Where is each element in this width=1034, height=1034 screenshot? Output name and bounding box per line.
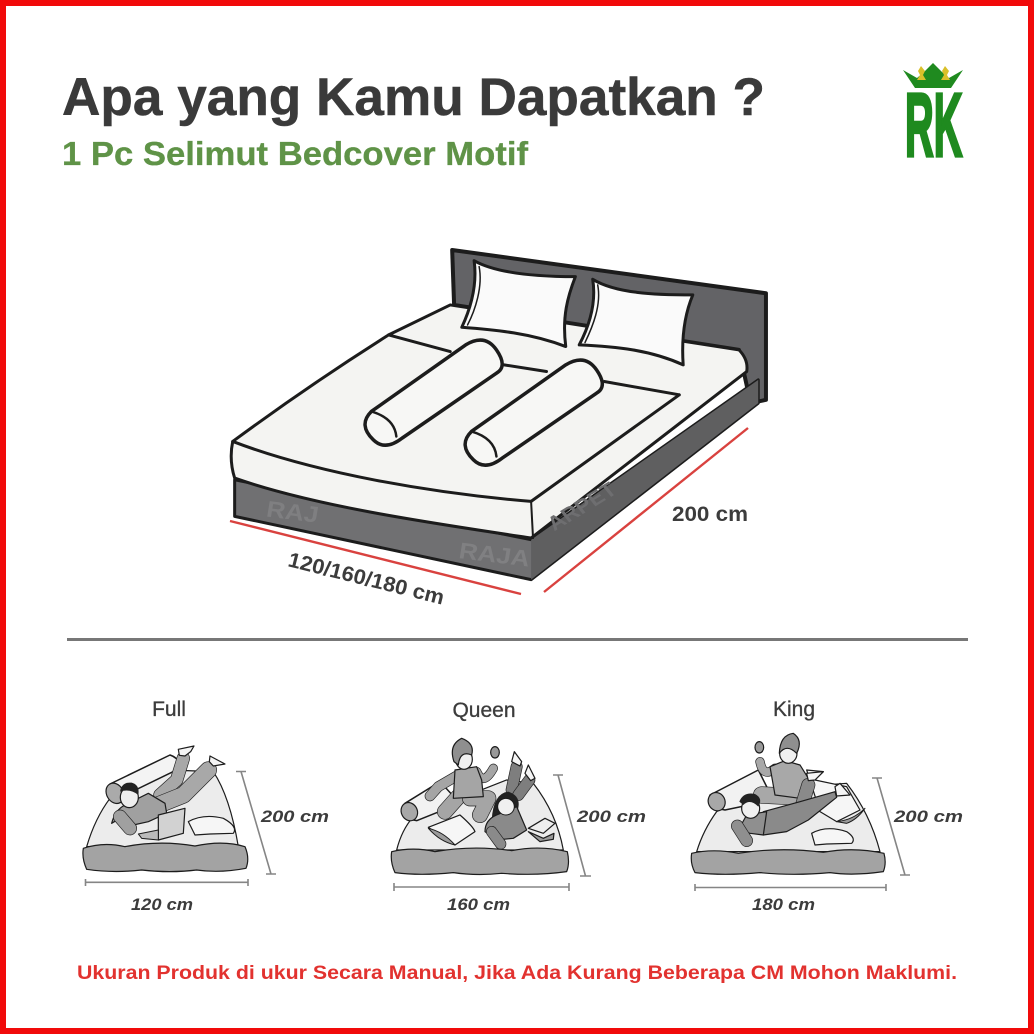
dimension line: Queen height xyxy=(553,775,591,876)
heading: Queen: Queen xyxy=(452,699,516,722)
size: King xyxy=(691,698,963,914)
bed base xyxy=(235,380,758,580)
large bed illustration xyxy=(231,250,766,580)
headboard xyxy=(452,250,766,403)
red dimension line: width xyxy=(230,521,521,594)
illustration: Full bed with person and cat xyxy=(83,746,248,872)
watermark: RAJ xyxy=(265,497,320,528)
title: Apa yang Kamu Dapatkan ? xyxy=(62,68,765,127)
logo: RK crown: RK xyxy=(905,75,962,176)
label: Queen 200 cm: 200 cm xyxy=(576,807,646,826)
label: Full 200 cm: 200 cm xyxy=(260,807,329,826)
divider xyxy=(67,638,968,641)
pillow right xyxy=(579,279,693,365)
dimension line: King height xyxy=(872,778,910,875)
pillow left xyxy=(462,261,575,347)
label: bed width: 120/160/180 cm xyxy=(286,549,447,610)
mattress xyxy=(231,305,747,538)
dimension line: Queen width xyxy=(394,883,569,891)
label: bed length: 200 cm xyxy=(672,503,748,526)
illustration: Queen bed with two people xyxy=(391,738,568,875)
dimension line: King width xyxy=(695,884,886,891)
bolster left xyxy=(365,340,502,445)
label: Queen 160 cm: 160 cm xyxy=(447,895,510,914)
heading: King: King xyxy=(773,698,815,721)
red dimension line: length xyxy=(544,428,748,592)
label: Full 120 cm: 120 cm xyxy=(131,895,193,914)
heading: Full: Full xyxy=(152,698,186,721)
bolster right xyxy=(465,360,602,465)
large bed illustration: RAJA xyxy=(457,539,532,572)
illustration: King bed with two people and cat xyxy=(691,733,885,874)
subtitle: 1 Pc Selimut Bedcover Motif xyxy=(62,135,529,172)
label: King 200 cm: 200 cm xyxy=(893,807,963,826)
dimension line: Full width xyxy=(86,879,248,886)
size: Full xyxy=(83,698,329,914)
label: King 180 cm: 180 cm xyxy=(752,895,815,914)
large bed illustration: ARPET xyxy=(542,477,621,535)
dimension line: Full height xyxy=(236,772,276,874)
footer note: Ukuran Produk di ukur Secara Manual, Jika Ada Kurang Beberapa CM Mohon Maklumi. xyxy=(77,962,957,984)
size: Queen xyxy=(391,699,646,914)
